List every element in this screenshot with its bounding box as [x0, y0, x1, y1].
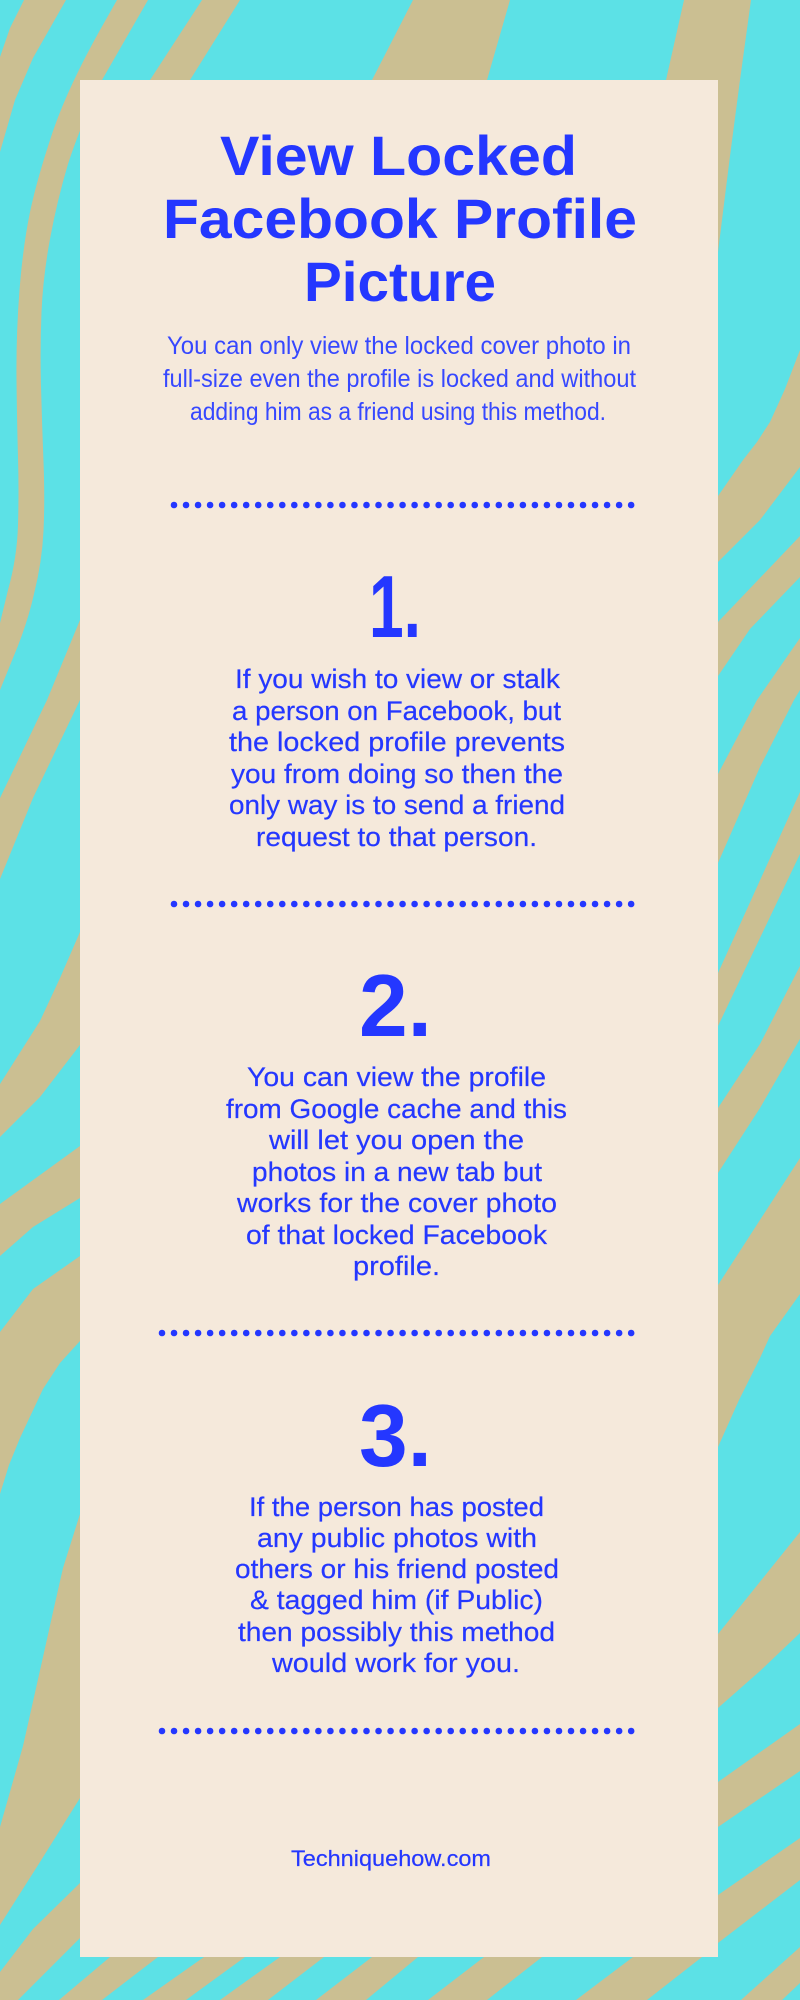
dotted divider 3 — [162, 1330, 632, 1336]
intro text block: You can only view the locked cover photo in — [167, 332, 631, 360]
step 3 text — [235, 1492, 559, 1678]
step 3 text: then possibly this method — [238, 1617, 555, 1647]
step 3 text: others or his friend posted — [235, 1554, 559, 1584]
step 3 text: If the person has posted — [249, 1492, 544, 1522]
step 2 text: from Google cache and this — [226, 1094, 567, 1124]
dotted divider 2 — [174, 901, 632, 907]
title: View Locked — [220, 124, 577, 187]
intro text block: full-size even the profile is locked and without — [163, 365, 636, 393]
step 3 text: any public photos with — [257, 1523, 537, 1553]
step 2 text: works for the cover photo — [236, 1188, 557, 1218]
step 1 text: the locked profile prevents — [229, 727, 565, 757]
dotted divider 1 — [174, 502, 632, 508]
step 1 text: request to that person. — [256, 822, 537, 852]
title — [163, 124, 637, 313]
step 2 text: will let you open the — [268, 1125, 524, 1155]
step 2 number: 2. — [359, 956, 432, 1055]
step 2 text: photos in a new tab but — [252, 1157, 543, 1187]
intro text block — [163, 332, 636, 426]
intro text block: adding him as a friend using this method. — [190, 398, 606, 426]
step 3 text: would work for you. — [271, 1648, 520, 1678]
step 3 number: 3. — [359, 1386, 432, 1485]
footer source credit: Techniquehow.com — [291, 1846, 491, 1871]
step 1 text: you from doing so then the — [231, 759, 563, 789]
step 1 text: only way is to send a friend — [229, 790, 565, 820]
dotted divider 4 — [162, 1728, 632, 1734]
panel: cream content card — [80, 80, 718, 1957]
step 2 text: profile. — [353, 1251, 440, 1281]
title: Picture — [304, 250, 496, 313]
step 1 text — [229, 664, 565, 852]
step 2 text: You can view the profile — [247, 1062, 546, 1092]
title: Facebook Profile — [163, 187, 637, 250]
step 1 text: If you wish to view or stalk — [235, 664, 561, 694]
step 2 text — [226, 1062, 567, 1281]
step 1 number: 1. — [369, 557, 421, 656]
step 3 text: & tagged him (if Public) — [250, 1585, 543, 1615]
step 2 text: of that locked Facebook — [246, 1220, 548, 1250]
step 1 text: a person on Facebook, but — [232, 696, 562, 726]
